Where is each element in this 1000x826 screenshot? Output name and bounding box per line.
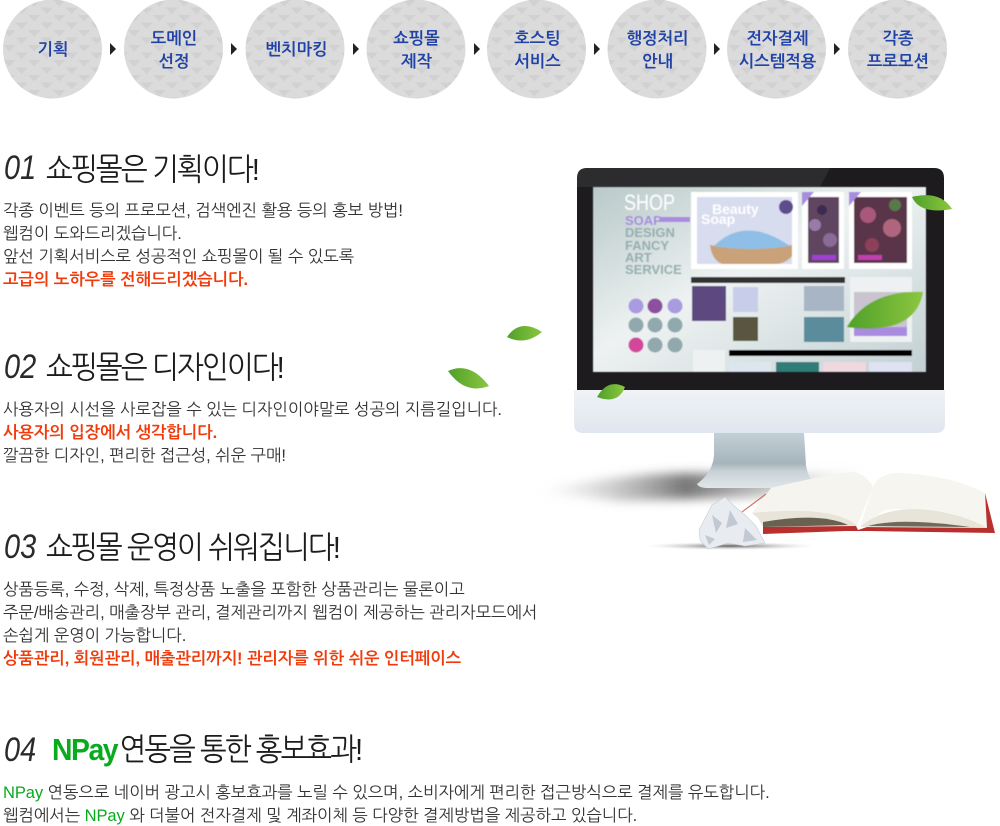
section 01 heading: 쇼핑몰은 기획이다! bbox=[46, 152, 258, 187]
monitor chin bbox=[574, 390, 945, 433]
monitor screen bbox=[593, 187, 926, 372]
section 04 text: NPay 연동으로 네이버 광고시 홍보효과를 노릴 수 있으며, 소비자에게 편리한 접근방식으로 결제를 유도합니다. bbox=[3, 784, 770, 802]
section 01 text: 고급의 노하우를 전해드리겠습니다. bbox=[3, 271, 248, 289]
section 02 text: 깔끔한 디자인, 편리한 접근성, 쉬운 구매! bbox=[3, 447, 286, 465]
section 04 text bbox=[3, 784, 770, 825]
step: 기획: 기획 bbox=[37, 41, 69, 59]
monitor screen: SHOP bbox=[624, 190, 675, 215]
step: 벤치마킹: 벤치마킹 bbox=[265, 41, 328, 59]
section 03 text: 주문/배송관리, 매출장부 관리, 결제관리까지 웹컴이 제공하는 관리자모드에서 bbox=[3, 604, 537, 622]
step: 호스팅 서비스: 서비스 bbox=[514, 52, 561, 70]
section 04 number: 04 bbox=[4, 731, 36, 769]
step: 각종 프로모션 bbox=[867, 30, 929, 70]
section 03 text: 상품등록, 수정, 삭제, 특정상품 노출을 포함한 상품관리는 물론이고 bbox=[3, 581, 465, 599]
step: 각종 프로모션: 프로모션 bbox=[867, 52, 929, 70]
leaves bbox=[448, 195, 952, 399]
step: 도메인 선정 bbox=[151, 30, 197, 70]
section 01 number: 01 bbox=[4, 149, 36, 187]
section 02 number: 02 bbox=[4, 348, 36, 386]
section 01 text bbox=[3, 202, 403, 289]
step circles bbox=[3, 0, 947, 98]
crumpled paper bbox=[699, 497, 765, 549]
monitor screen: FANCY bbox=[625, 238, 669, 253]
step: 쇼핑몰 제작: 쇼핑몰 bbox=[393, 30, 440, 48]
section 02 heading: 쇼핑몰은 디자인이다! bbox=[46, 350, 283, 385]
section 03 text: 손쉽게 운영이 가능합니다. bbox=[3, 627, 186, 645]
section 01 text: 웹컴이 도와드리겠습니다. bbox=[3, 225, 182, 243]
open book bbox=[742, 472, 995, 534]
section 03 number: 03 bbox=[4, 528, 36, 566]
step: 행정처리 안내: 행정처리 bbox=[626, 30, 689, 48]
monitor screen: SERVICE bbox=[625, 262, 682, 277]
step: 각종 프로모션: 각종 bbox=[882, 30, 914, 48]
section 02 text bbox=[3, 401, 502, 465]
step: 도메인 선정: 선정 bbox=[158, 52, 190, 70]
section 02 text: 사용자의 시선을 사로잡을 수 있는 디자인이야말로 성공의 지름길입니다. bbox=[3, 401, 502, 419]
section 03 heading: 쇼핑몰 운영이 쉬워집니다! bbox=[46, 530, 339, 565]
step: 행정처리 안내: 안내 bbox=[642, 52, 673, 70]
step: 전자결제 시스템적용: 시스템적용 bbox=[739, 52, 816, 70]
section 02 text: 사용자의 입장에서 생각합니다. bbox=[3, 424, 217, 442]
step: 전자결제 시스템적용: 전자결제 bbox=[746, 30, 809, 48]
monitor screen: Soap bbox=[701, 211, 735, 227]
step arrows bbox=[110, 43, 840, 55]
step: 호스팅 서비스: 호스팅 bbox=[514, 30, 561, 48]
step: 도메인 선정: 도메인 bbox=[151, 30, 197, 48]
step: 쇼핑몰 제작 bbox=[393, 30, 440, 70]
monitor frame bbox=[577, 168, 944, 390]
monitor shadow bbox=[535, 473, 870, 501]
monitor screen: SOAP bbox=[625, 213, 662, 228]
step: 쇼핑몰 제작: 제작 bbox=[401, 52, 432, 70]
paper shadow bbox=[645, 542, 815, 550]
monitor screen: Beauty bbox=[712, 201, 759, 217]
step: 행정처리 안내 bbox=[626, 30, 689, 70]
section 04 text: 웹컴에서는 NPay 와 더불어 전자결제 및 계좌이체 등 다양한 결제방법을 제공하고 있습니다. bbox=[3, 807, 637, 825]
section 01 text: 앞선 기획서비스로 성공적인 쇼핑몰이 될 수 있도록 bbox=[3, 248, 354, 266]
section 03 text: 상품관리, 회원관리, 매출관리까지! 관리자를 위한 쉬운 인터페이스 bbox=[3, 650, 461, 668]
monitor screen: ART bbox=[625, 250, 652, 265]
section 01 text: 각종 이벤트 등의 프로모션, 검색엔진 활용 등의 홍보 방법! bbox=[3, 202, 403, 220]
step: 전자결제 시스템적용 bbox=[739, 30, 816, 70]
step: 호스팅 서비스 bbox=[514, 30, 561, 70]
section 04 heading: NPay 연동을 통한 홍보효과! bbox=[52, 732, 361, 767]
section 03 text bbox=[3, 581, 537, 668]
monitor stand bbox=[697, 433, 815, 488]
monitor screen: DESIGN bbox=[625, 225, 675, 240]
